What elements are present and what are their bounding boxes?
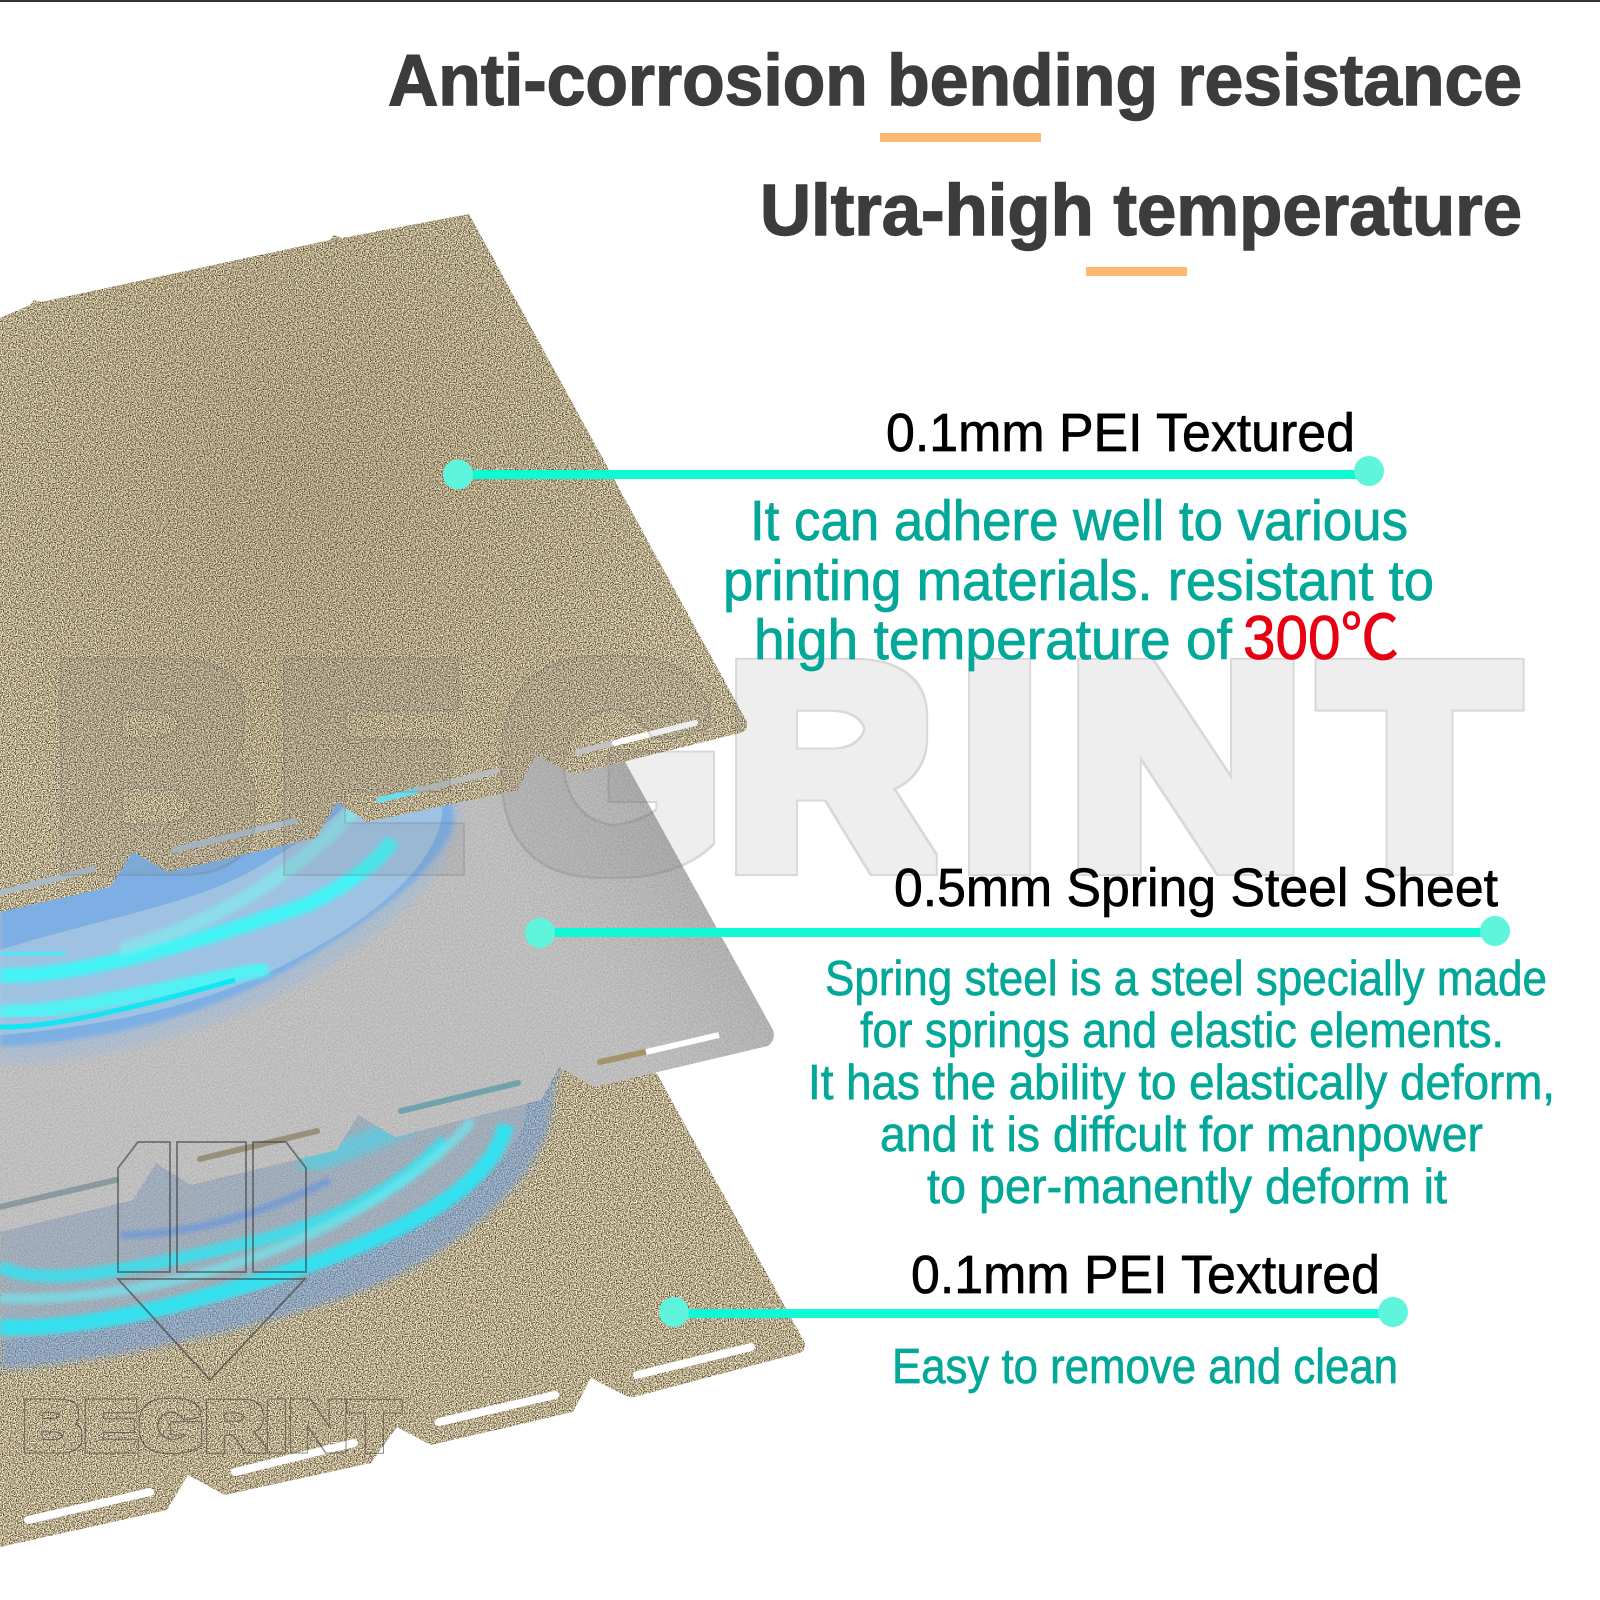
steel layer description (808, 952, 1555, 1214)
steel layer title: 0.5mm Spring Steel Sheet (894, 858, 1498, 918)
callout: spring steel layer (525, 858, 1555, 1214)
top layer description: 300℃ (1243, 604, 1399, 673)
steel sheet slots (0, 1035, 719, 1207)
steel sheet heat ring (0, 802, 463, 1066)
callout: bottom PEI layer (659, 1245, 1408, 1394)
watermark: large BEGRINT: T (1322, 608, 1517, 926)
top layer leader line (443, 456, 1384, 490)
watermark: small logo (118, 1142, 306, 1380)
watermark: small BEGRINT wordmark: BEGRINT (22, 1387, 400, 1465)
bottom plate heat ring (0, 1060, 560, 1370)
heading: ultra-high temperature: Ultra-high temperature (760, 171, 1522, 251)
heading underline 2 (1086, 267, 1187, 276)
top layer description: printing materials. resistant to (723, 549, 1434, 613)
bottom layer leader line (659, 1297, 1408, 1327)
steel layer description: to per-manently deform it (927, 1160, 1447, 1214)
steel layer description: and it is diffcult for manpower (880, 1108, 1483, 1162)
heading underline 1 (880, 133, 1041, 142)
watermark: large BEGRINT: N (1066, 608, 1306, 926)
watermark: large BEGRINT: BEGRI (52, 608, 1039, 926)
panel: spring steel sheet (0, 755, 774, 1232)
top border line (0, 0, 1600, 2)
top layer title: 0.1mm PEI Textured (886, 403, 1355, 463)
steel layer description: It has the ability to elastically deform, (808, 1056, 1555, 1110)
callout: top PEI layer (443, 403, 1434, 673)
top layer description (723, 489, 1434, 673)
steel layer description: for springs and elastic elements. (860, 1004, 1504, 1058)
bottom plate slots (28, 1347, 751, 1520)
top plate slots (0, 723, 695, 893)
steel layer leader line (525, 916, 1510, 948)
watermark: large BEGRINT (52, 608, 1517, 926)
panel: bottom PEI plate (0, 1067, 806, 1547)
panel: top PEI plate (0, 200, 760, 920)
heading: anti-corrosion: Anti-corrosion bending resistance (388, 41, 1522, 121)
bottom layer description: Easy to remove and clean (892, 1340, 1398, 1394)
bottom layer title: 0.1mm PEI Textured (911, 1245, 1380, 1305)
top layer description: high temperature of (754, 608, 1232, 672)
top layer description: It can adhere well to various (750, 489, 1408, 553)
